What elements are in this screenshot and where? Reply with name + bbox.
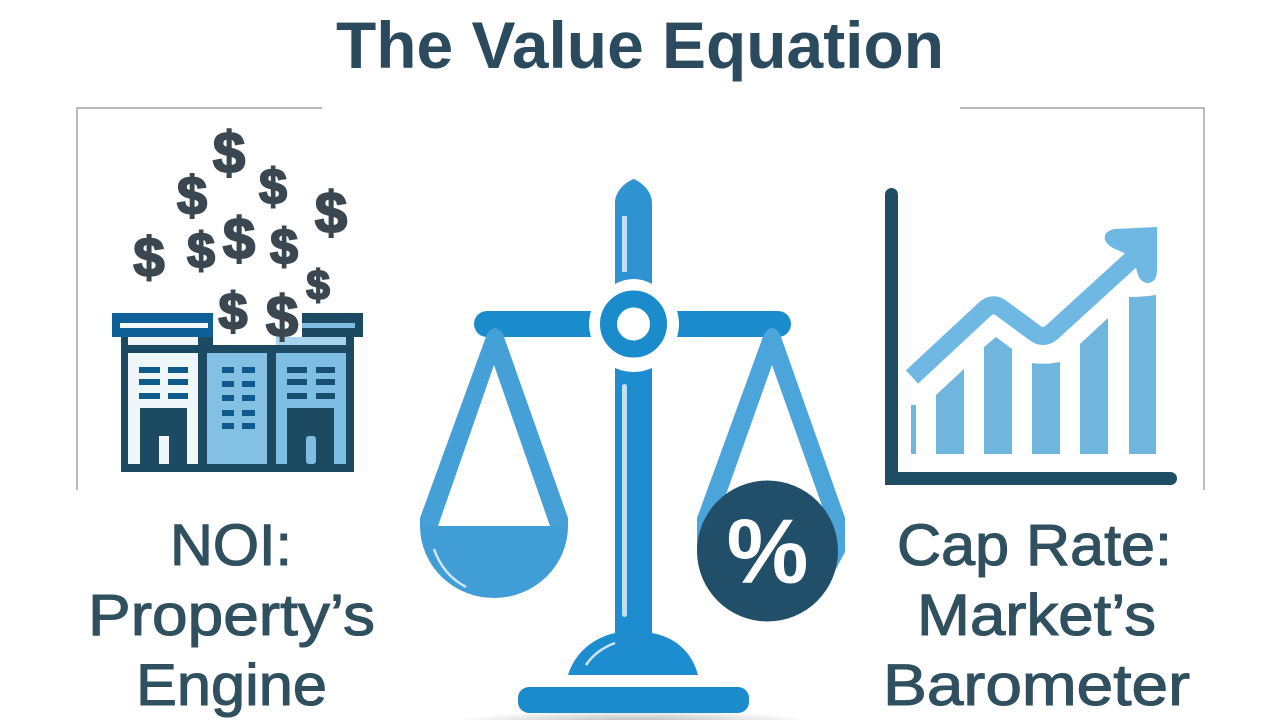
- pole: [615, 179, 652, 633]
- dollar signs: $: [266, 284, 298, 350]
- trend arrow: [912, 227, 1157, 377]
- label: Cap Rate: [883, 513, 1190, 718]
- icon: building with rising dollars: [112, 120, 363, 472]
- bars: [911, 295, 1156, 454]
- title: The Value Equation: [336, 8, 944, 82]
- label: NOI: NOI:: [170, 513, 292, 578]
- dollar signs: $: [315, 180, 347, 246]
- building: [112, 313, 363, 472]
- axes: [892, 194, 1170, 478]
- dollar signs: $: [213, 120, 245, 186]
- beam: [474, 311, 791, 337]
- label: Cap Rate: Barometer: [883, 653, 1190, 718]
- dollar signs: $: [259, 159, 287, 215]
- label: Cap Rate: Cap Rate:: [897, 513, 1172, 578]
- right pan with percent weight: %: [727, 501, 808, 603]
- left pan: [420, 328, 568, 598]
- base: [518, 633, 749, 713]
- dollar signs: $: [270, 219, 298, 275]
- dollar signs: $: [223, 206, 255, 272]
- dollar signs: $: [219, 283, 248, 341]
- pivot ring: [608, 299, 658, 349]
- dollar signs: $: [133, 226, 165, 288]
- icon: balance scale: [420, 179, 845, 720]
- dollar signs: $: [187, 223, 215, 279]
- icon: growth chart: [892, 194, 1170, 478]
- label: NOI: Engine: [136, 653, 327, 718]
- label: Cap Rate: Market’s: [917, 583, 1156, 648]
- dollar signs: $: [306, 262, 330, 308]
- right pan with percent weight: [697, 328, 845, 622]
- dollar signs: [133, 120, 347, 350]
- scale shadow: [454, 710, 814, 720]
- label: NOI: [88, 513, 375, 718]
- dollar signs: $: [177, 166, 207, 226]
- label: NOI: Property’s: [88, 583, 375, 648]
